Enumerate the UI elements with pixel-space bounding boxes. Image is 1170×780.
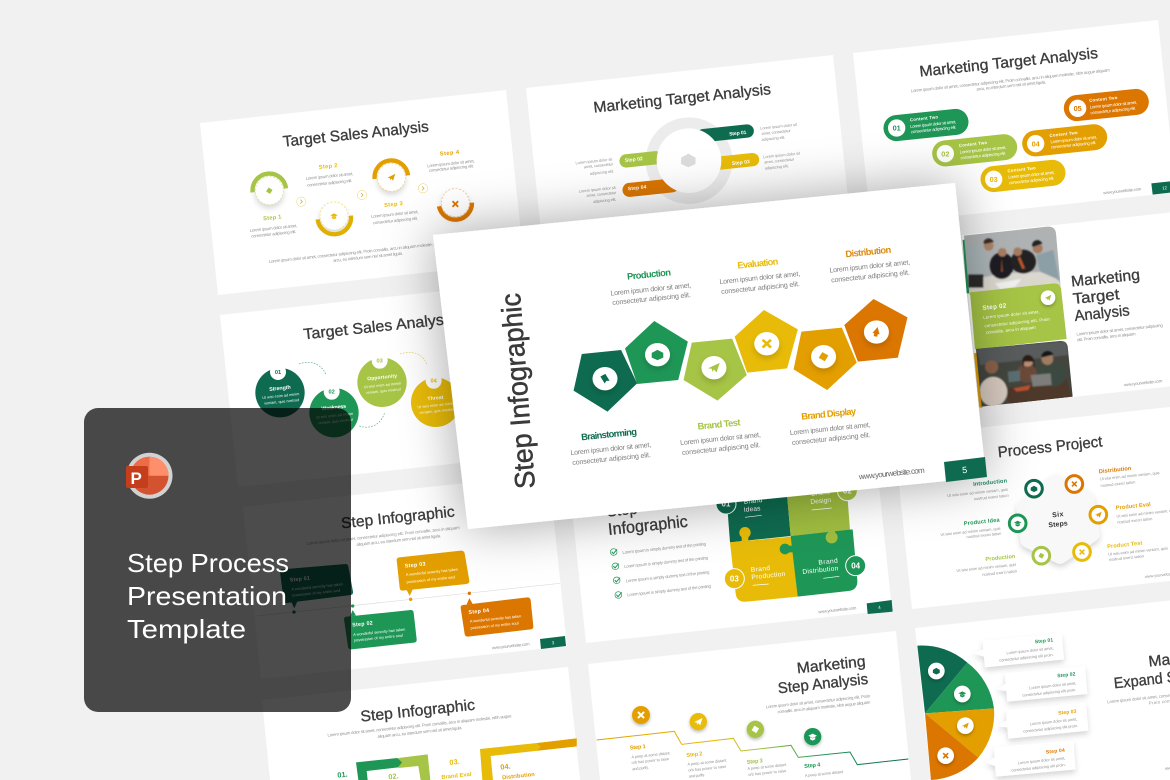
checklist: Lorem Ipsum is simply dummy text of the printing	[622, 541, 707, 555]
circle 01 Strength: veniam, quis nostrud	[264, 398, 299, 406]
card descriptions: consectetur adipiscing elit proin.	[1023, 723, 1078, 734]
pill 01: consectetur adipiscing elit	[911, 125, 957, 134]
callout: step 04: possession of my entire soul	[470, 621, 519, 630]
callout: step 04: Step 04	[468, 608, 489, 616]
step descriptions: Lorem ipsum dolor sit amet,	[371, 209, 419, 219]
heading	[1113, 647, 1170, 692]
puzzle captions: Ideas	[743, 505, 761, 514]
step descriptions: nostrud exerci tation	[1117, 516, 1153, 525]
side descriptions: adipiscing elit.	[590, 168, 614, 176]
card descriptions	[999, 645, 1078, 773]
label: Production: consectetur adipiscing elit.	[612, 291, 691, 307]
description and url: elit. Proin convallis, arcu in aliquam	[1077, 331, 1136, 342]
step labels: Step 1	[263, 214, 282, 222]
pill 01: Lorem ipsum dolor sit amet,	[910, 119, 957, 129]
step descriptions: nostrud exerci tation	[1100, 479, 1136, 488]
page tab: 12	[1162, 185, 1168, 191]
callout cards	[973, 633, 1088, 777]
side descriptions: Lorem ipsum dolor sit	[763, 150, 801, 159]
description	[1107, 689, 1170, 771]
callout: step 01: possession of my entire soul	[292, 589, 341, 598]
card descriptions: consectetur adipiscing elit proin.	[1011, 762, 1066, 773]
callout: step 03: A wonderful serenity has taken	[406, 568, 458, 577]
step descriptions	[631, 750, 844, 779]
title panel	[84, 408, 351, 712]
pill 04: consectetur adipiscing elit	[1051, 140, 1097, 150]
step labels: Product Idea	[964, 518, 1001, 527]
side descriptions: adipiscing elit.	[765, 163, 789, 171]
slide: Marketing Target Analysis photos	[960, 212, 1170, 408]
circle 04 Threat: 04	[431, 379, 438, 385]
step labels: Step 3	[747, 758, 763, 766]
callout: step 03: possession of my entire soul	[406, 575, 456, 584]
pill 04: Lorem ipsum dolor sit amet,	[1050, 134, 1097, 144]
subheading: Lorem ipsum dolor sit amet, consectetur adipiscing elit. Proin convallis, arcu in aliquam	[306, 525, 460, 546]
step descriptions: Ut wisi enim ad minim veniam, quis	[940, 526, 1001, 537]
heading: Process Project	[997, 433, 1104, 461]
label: Brand Display: Lorem ipsum dolor sit amet,	[790, 421, 871, 437]
connector chevrons	[297, 184, 428, 206]
slide: Marketing Target Analysis pills	[853, 20, 1170, 225]
footer url: www.yourwebsite.com	[1103, 186, 1142, 195]
slide: Target Sales Analysis with four arcs	[200, 90, 524, 295]
page tab	[867, 600, 893, 614]
panel text: convallis, arcu in aliquam	[986, 325, 1036, 335]
side descriptions: amet, consectetur	[761, 128, 792, 136]
centre label: Steps	[1048, 520, 1068, 529]
side descriptions: Lorem ipsum dolor sit	[575, 156, 613, 165]
step descriptions: Ut wisi enim ad minim veniam, quis	[1108, 545, 1168, 557]
pill 05: Lorem ipsum dolor sit amet,	[1090, 100, 1137, 110]
heading: Target	[1072, 286, 1121, 308]
step descriptions: A peep at some distant	[805, 769, 844, 778]
step descriptions: Lorem ipsum dolor sit amet,	[427, 158, 475, 168]
number labels: 02	[843, 486, 852, 495]
circle 02 Weakness: Weakness	[321, 404, 346, 412]
puzzle captions: Production	[751, 571, 786, 581]
checklist: Lorem Ipsum is simply dummy text of the printing	[624, 555, 709, 569]
heading	[1070, 267, 1141, 325]
heading: Infographic	[607, 512, 689, 539]
step 3 arc icon	[375, 160, 408, 191]
label: Evaluation: consectetur adipiscing elit.	[721, 280, 800, 296]
footer url: www.yourwebsite.com	[857, 466, 925, 481]
pill labels: Step 02	[625, 156, 643, 164]
step descriptions: and purify.	[689, 772, 705, 779]
card descriptions: consectetur adipiscing elit proin.	[999, 652, 1054, 663]
label: Brainstorming: consectetur adipiscing elit.	[572, 451, 651, 467]
step descriptions	[250, 158, 475, 264]
photo: team at table	[964, 226, 1061, 295]
pill 05	[1063, 88, 1150, 122]
callout: step 04	[461, 592, 533, 637]
step labels	[964, 466, 1151, 563]
circle 01 Strength: Strength	[269, 385, 291, 393]
callout: step 01: Step 01	[290, 576, 310, 584]
footer url: www.yourwebsite.com	[492, 641, 530, 650]
description and url: www.yourwebsite.com	[1124, 378, 1163, 387]
icon: PowerPoint	[126, 453, 172, 499]
pills	[619, 124, 760, 198]
heading: Marketing Target Analysis	[593, 81, 772, 117]
page tab	[540, 636, 566, 649]
circle 03 Opportunity: 03	[377, 359, 383, 365]
heading: Marketing	[1070, 267, 1141, 291]
step labels: Production	[985, 554, 1016, 563]
side descriptions	[575, 122, 801, 204]
circle 01 Strength	[255, 364, 305, 417]
frame 04	[480, 738, 577, 780]
slide: Marketing Target Analysis ring	[526, 55, 851, 260]
heading: Step Infographic	[360, 697, 476, 726]
label: Distribution: Lorem ipsum dolor sit amet,	[829, 258, 911, 275]
description: Lorem ipsum dolor sit amet, consectetur adipiscing elit. Proin	[766, 693, 871, 709]
circle 03 Opportunity	[357, 353, 407, 407]
step labels	[337, 757, 536, 780]
step descriptions: nostrud exerci tation	[966, 531, 1002, 539]
card labels: Step 02	[1057, 671, 1076, 679]
card labels: Step 04	[1046, 748, 1065, 756]
panel title: Step Process	[127, 548, 289, 578]
panel text: consectetur adipiscing elit. Proin	[984, 316, 1051, 328]
pill 04	[1021, 123, 1108, 158]
icon rings	[1009, 476, 1107, 564]
side descriptions: amet, consectetur	[764, 156, 795, 165]
outer ring	[646, 117, 732, 204]
card descriptions: consectetur adipiscing elit proin.	[1022, 687, 1076, 698]
label: Brand Test: consectetur adipiscing elit.	[682, 441, 761, 457]
label: Distribution: Distribution	[845, 244, 892, 259]
heading: Step	[606, 499, 638, 521]
description and url: Lorem ipsum dolor sit amet, consectetur adipiscing	[1076, 323, 1164, 337]
slide: Marketing Step Analysis	[588, 631, 911, 780]
step labels	[630, 744, 822, 770]
central hexagon	[1024, 482, 1092, 556]
label: Evaluation: Evaluation	[737, 255, 779, 271]
icon glyphs	[637, 711, 817, 741]
card descriptions: Lorem ipsum dolor sit amet,	[1030, 716, 1078, 726]
central disc with box icon	[657, 128, 721, 193]
panel icon	[1041, 290, 1055, 305]
pentagon 2 production	[625, 321, 688, 384]
circle 02 Weakness: 02	[329, 390, 335, 396]
pill 05: 05	[1074, 104, 1082, 113]
puzzle	[725, 465, 857, 602]
puzzle captions: Brand	[750, 565, 771, 574]
panel title	[127, 548, 289, 644]
subheading: arcu, eu interdum sem nisl sit amet ligula.	[976, 79, 1046, 92]
centre label	[1048, 511, 1068, 529]
circle 03 Opportunity: veniam, quis nostrud	[366, 387, 401, 395]
pill 05: Content Two	[1089, 95, 1118, 103]
step descriptions: nostrud exerci tation	[982, 568, 1017, 577]
slide: Step Infographic frames	[262, 667, 580, 780]
puzzle numbers	[716, 481, 866, 589]
label: Brainstorming	[570, 426, 652, 467]
pill 03: Content Two	[1007, 165, 1036, 173]
heading: Step Analysis	[777, 671, 869, 697]
step 1 arc icon	[253, 174, 286, 205]
pill labels: Step 04	[628, 184, 647, 192]
pill 01: Content Two	[910, 114, 939, 122]
pill 02: Content Two	[959, 140, 988, 148]
number labels	[722, 486, 861, 584]
pentagon 5 brand display	[794, 328, 857, 390]
step labels: Product Test	[1107, 541, 1143, 550]
circle 01 Strength: Ut wisi enim ad minim	[262, 392, 300, 400]
step descriptions: Lorem ipsum dolor sit amet,	[306, 171, 354, 181]
slide: Marketing Expand pie	[915, 600, 1170, 780]
centre label: Six	[1052, 511, 1064, 519]
slide: Step Infographic callouts	[243, 474, 567, 679]
step descriptions: consectetur adipiscing elit.	[251, 229, 297, 239]
circle 04 Threat	[411, 373, 460, 427]
puzzle captions	[743, 489, 839, 585]
step descriptions: consectetur adipiscing elit.	[429, 163, 474, 173]
callout: step 03: Step 03	[405, 562, 426, 570]
label: Brand Test: Brand Test	[697, 416, 741, 432]
step descriptions: Ut wisi enim ad minim veniam, quis	[956, 562, 1016, 573]
step labels: Step 2	[319, 163, 338, 171]
puzzle captions: Design	[810, 497, 832, 506]
heading: Target Sales Analysis	[303, 310, 457, 343]
pill labels: Step 03	[732, 159, 750, 167]
step descriptions: nostrud exerci tation	[974, 493, 1009, 501]
pill 04: 04	[1032, 139, 1041, 148]
main slide: Step Infographic pentagons	[433, 183, 987, 529]
page tab: 4	[878, 605, 881, 610]
pill 03: Lorem ipsum dolor sit amet,	[1008, 170, 1055, 180]
puzzle captions: Brand	[818, 558, 838, 567]
step descriptions: Lorem ipsum dolor sit amet,	[250, 223, 298, 233]
step descriptions: nostrud exerci tation	[1109, 553, 1144, 562]
photo: group at laptops	[973, 338, 1073, 408]
checklist	[610, 541, 712, 598]
step labels: Step 2	[686, 751, 703, 759]
ring glyphs	[1014, 481, 1102, 559]
timeline	[257, 583, 560, 616]
side descriptions: adipiscing elit.	[593, 197, 617, 204]
pill labels: Step 01	[729, 130, 747, 138]
pentagon 1 brainstorming	[574, 350, 637, 412]
side descriptions: adipiscing elit.	[761, 135, 786, 142]
checklist: Lorem Ipsum is simply dummy text of the printing	[627, 583, 712, 597]
pentagon 3 brand test	[684, 339, 747, 401]
label: Production: Lorem ipsum dolor sit amet,	[610, 281, 692, 298]
pentagon chain	[574, 299, 907, 412]
pill 03: 03	[990, 175, 998, 184]
heading: Step Infographic	[340, 503, 456, 532]
step descriptions: consectetur adipiscing elit.	[307, 178, 353, 188]
step labels: Product Eval	[1116, 502, 1151, 512]
step descriptions: orb has power to raise	[748, 768, 787, 777]
side descriptions: Lorem ipsum dolor sit	[579, 185, 617, 194]
circle 04 Threat: veniam, quis nostrud	[419, 407, 455, 415]
step descriptions: and purify.	[632, 765, 649, 771]
pill 03: consectetur adipiscing elit	[1009, 176, 1055, 185]
callout: step 02	[344, 604, 417, 649]
step labels: 03.	[449, 757, 460, 767]
side descriptions: amet, consectetur	[584, 161, 614, 169]
slide: Process Project	[894, 407, 1170, 609]
pentagon 6 distribution	[844, 299, 907, 362]
circle 01 Strength: 01	[275, 370, 281, 376]
step labels: 04.	[500, 762, 511, 772]
step descriptions: Lorem ipsum dolor sit amet, consectetur adipiscing elit. Proin convallis, arcu in aliquam molestie, nibh augue aliquam	[269, 238, 468, 264]
panel title: Presentation	[127, 581, 287, 611]
step descriptions	[940, 470, 1170, 579]
card labels: Step 03	[1058, 709, 1077, 717]
pentagon 4 evaluation	[735, 310, 798, 373]
page tab: 3	[552, 640, 555, 645]
step descriptions: orb has power to raise	[631, 756, 670, 765]
card labels	[1035, 637, 1077, 756]
icon: PowerPoint: P	[130, 469, 142, 488]
label: Evaluation: Lorem ipsum dolor sit amet,	[719, 270, 801, 286]
pill 03	[979, 159, 1067, 193]
pill 05: consectetur adipiscing elit	[1090, 106, 1136, 115]
label: Brand Display: consectetur adipiscing elit.	[791, 431, 871, 447]
callout: step 01	[280, 564, 353, 614]
card labels: Step 01	[1035, 637, 1054, 645]
circle 03 Opportunity: Ut wisi enim ad minim	[364, 381, 401, 389]
step 4 arc icon	[439, 189, 472, 220]
step descriptions: arcu, eu interdum sem nisl sit amet ligula.	[333, 251, 403, 263]
pill 01	[882, 108, 970, 142]
callout: step 02: Step 02	[352, 621, 373, 629]
circle 02 Weakness: Ut wisi enim ad minim	[316, 412, 353, 420]
subheading: Lorem ipsum dolor sit amet, consectetur adipiscing elit. Proin convallis, arcu in aliquam molestie, nibh augue	[327, 713, 512, 738]
slide: Step Infographic puzzle	[568, 438, 893, 643]
page tab	[1151, 181, 1170, 195]
checklist: Lorem Ipsum is simply dummy text of the printing	[626, 570, 710, 583]
step labels: Step 4	[440, 150, 460, 158]
panel text	[982, 302, 1051, 335]
step descriptions: A peep at some distant	[747, 762, 787, 771]
label: Distribution	[829, 244, 911, 284]
label: Brand Test: Lorem ipsum dolor sit amet,	[680, 431, 761, 447]
step labels: Step 1	[630, 744, 646, 752]
label: Brand Display	[790, 405, 871, 447]
circle 04 Threat: Ut wisi enim ad minim	[417, 401, 455, 409]
panel title: Template	[127, 614, 246, 644]
circle 04 Threat: Threat	[427, 395, 444, 402]
step descriptions: consectetur adipiscing elit.	[373, 216, 418, 225]
subheading: Lorem ipsum dolor sit amet, consectetur adipiscing elit. Proin convallis, arcu in aliquam molestie, nibh augue aliquam	[911, 67, 1110, 93]
label: Evaluation	[719, 255, 801, 296]
pill 04: Content Two	[1049, 130, 1078, 138]
frame 02	[356, 754, 430, 780]
step labels: Step 3	[384, 201, 403, 209]
heading	[606, 499, 689, 539]
step descriptions: Ut wisi enim ad minim veniam, quis	[947, 487, 1008, 498]
number labels: 01	[722, 500, 731, 509]
callout: step 02: A wonderful serenity has taken	[353, 628, 405, 637]
puzzle captions: Brand	[811, 489, 830, 498]
pill 02: consectetur adipiscing elit	[960, 151, 1006, 160]
subheading: aliquam arcu, eu interdum sem nisl sit amet ligula.	[377, 725, 463, 739]
label: Brand Display: Brand Display	[801, 405, 857, 422]
page tab: 5	[962, 465, 968, 475]
callout: step 01: A wonderful serenity has taken	[291, 582, 343, 592]
label: Brainstorming: Lorem ipsum dolor sit amet,	[570, 441, 652, 457]
side descriptions: amet, consectetur	[586, 190, 617, 198]
heading: Analysis	[1074, 302, 1131, 325]
card descriptions: Lorem ipsum dolor sit amet,	[1018, 755, 1066, 765]
main slide sheet	[433, 183, 986, 529]
footer url: www.yourwebsite.com	[818, 605, 857, 614]
slide: Target Sales Analysis circles	[220, 282, 544, 487]
number labels: 03	[730, 575, 739, 584]
description: convallis, arcu in aliquam molestie, nibh augue aliquam	[777, 700, 871, 714]
label: Production: Production	[627, 266, 672, 282]
side descriptions: Lorem ipsum dolor sit	[760, 122, 798, 131]
panel text: Step 02	[982, 302, 1007, 312]
dashed arrows	[299, 352, 427, 427]
circle 02 Weakness: veniam, quis nostrud	[318, 418, 353, 425]
heading: Target Sales Analysis	[282, 118, 430, 151]
card descriptions: Lorem ipsum dolor sit amet,	[1029, 680, 1077, 690]
card descriptions: Lorem ipsum dolor sit amet,	[1006, 645, 1054, 655]
puzzle captions: Brand	[743, 497, 763, 506]
label: Production	[610, 266, 692, 307]
heading	[777, 653, 869, 697]
pill 02	[931, 133, 1018, 168]
circle 02 Weakness	[309, 384, 359, 437]
stepped line	[597, 731, 908, 765]
green step panel	[970, 283, 1067, 349]
pie icons	[928, 663, 974, 764]
callout: step 02: possession of my entire soul	[354, 634, 403, 643]
step labels: Step 4	[804, 762, 822, 770]
page tab	[944, 457, 987, 482]
label: Distribution: consectetur adipiscing elit.	[831, 269, 910, 284]
step descriptions: A peep at some distant	[631, 750, 671, 759]
pill 01: 01	[893, 124, 901, 133]
vertical heading: Step Infographic	[495, 292, 541, 490]
callout: step 04: A wonderful serenity has taken	[470, 614, 521, 624]
label: Brand Test	[680, 416, 761, 457]
pill labels	[625, 130, 750, 192]
step descriptions: orb has power to raise	[688, 764, 727, 773]
step labels: 01.	[337, 770, 348, 780]
number labels: 04	[851, 562, 861, 571]
step labels: Distribution	[1099, 466, 1132, 475]
panel text: Lorem ipsum dolor sit amet,	[983, 309, 1040, 320]
description and url	[1076, 323, 1164, 387]
step descriptions: Ut wisi enim ad minim veniam, quis	[1100, 470, 1160, 481]
step labels	[263, 150, 460, 222]
callout: step 03	[397, 551, 469, 601]
pill 02: Lorem ipsum dolor sit amet,	[960, 145, 1007, 155]
step descriptions: A peep at some distant	[687, 758, 727, 767]
heading: Marketing Target Analysis	[919, 45, 1099, 81]
step 2 arc icon	[318, 202, 351, 234]
accent triangles	[963, 239, 990, 408]
label: Brainstorming: Brainstorming	[581, 426, 638, 442]
pie chart	[917, 646, 994, 780]
circle 03 Opportunity: Opportunity	[367, 373, 398, 382]
heading: Marketing	[796, 653, 866, 677]
pill 02: 02	[941, 149, 949, 158]
subheading: aliquam arcu, eu interdum sem nisl sit amet ligula.	[356, 533, 441, 547]
step icons	[632, 706, 821, 745]
step labels: Introduction	[973, 478, 1008, 488]
puzzle captions: Distribution	[802, 565, 839, 576]
